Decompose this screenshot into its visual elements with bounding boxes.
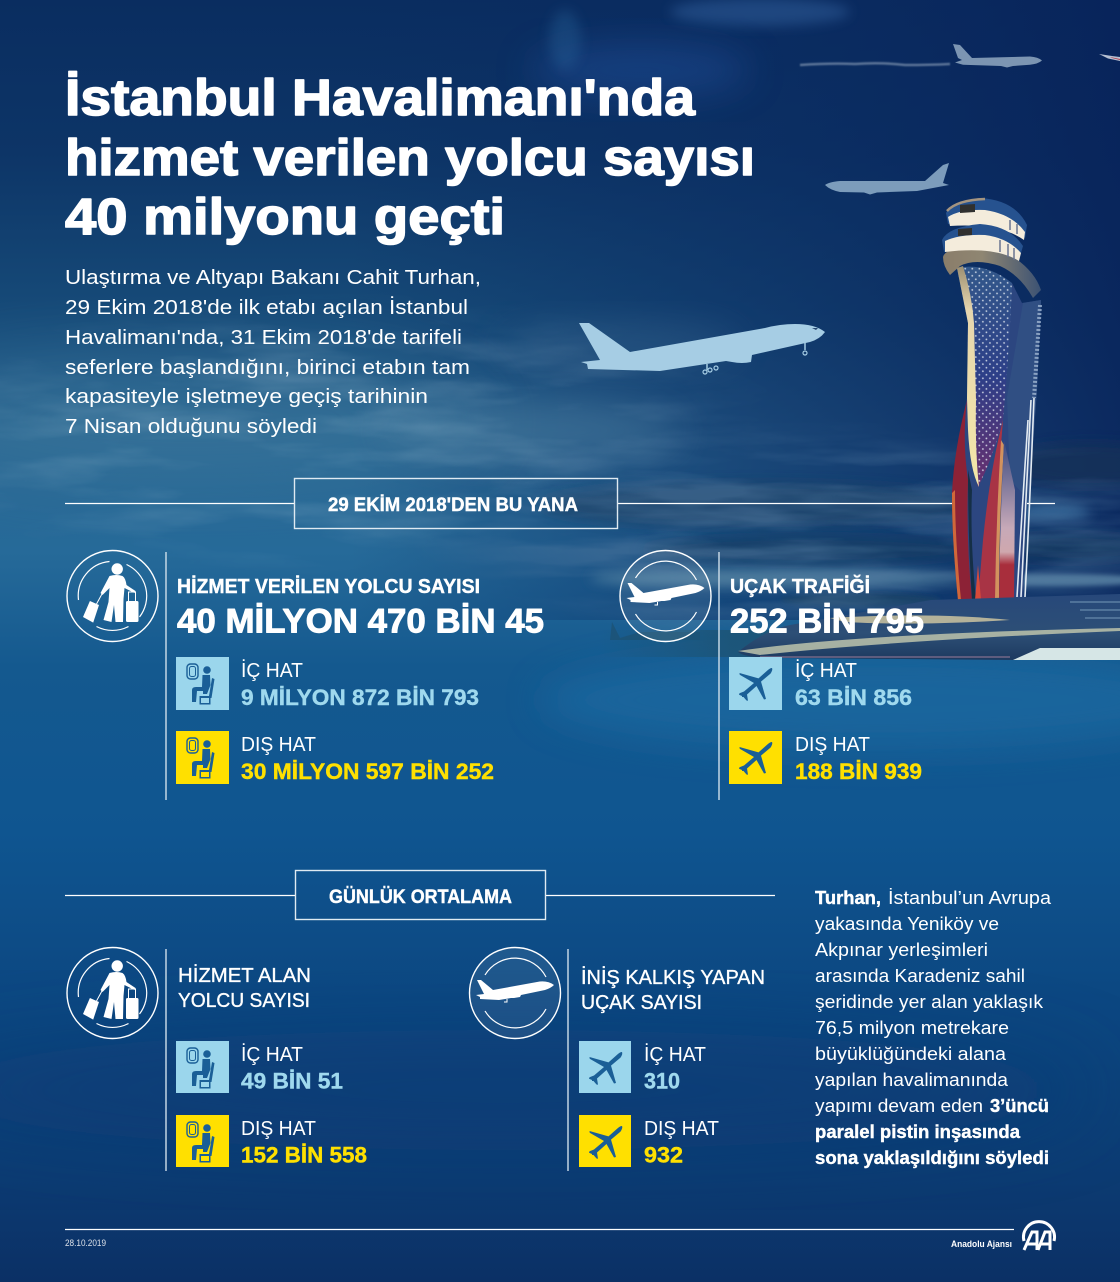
section header: daily average: GÜNLÜK ORTALAMA — [329, 885, 512, 908]
title: 40 milyonu geçti — [65, 188, 505, 245]
side text block — [815, 887, 1052, 1168]
intro paragraph — [65, 267, 481, 438]
terminal roof — [738, 594, 1120, 660]
section header: 29 Ekim: 29 EKİM 2018'DEN BU YANA — [328, 493, 578, 516]
panel: daily passengers — [67, 948, 367, 1171]
panel: aircraft traffic: UÇAK TRAFİĞİ — [730, 574, 870, 598]
section header: 29 Ekim — [65, 478, 1055, 528]
panel: daily flights: DIŞ HAT — [644, 1118, 719, 1140]
title: İstanbul Havalimanı'nda — [65, 69, 696, 126]
panel: daily flights: 310 — [644, 1068, 680, 1094]
panel: aircraft traffic: DIŞ HAT — [795, 734, 870, 756]
side text block: yapımı devam eden — [815, 1095, 983, 1116]
panel: daily flights: İNİŞ KALKIŞ YAPAN — [581, 966, 765, 989]
panel: aircraft traffic: 63 BİN 856 — [795, 685, 912, 710]
panel: daily passengers: HİZMET ALAN — [178, 964, 311, 987]
side text block: büyüklüğündeki alana — [815, 1043, 1007, 1064]
side text block: 76,5 milyon metrekare — [815, 1017, 1009, 1038]
side text block: şeridinde yer alan yaklaşık — [815, 991, 1044, 1012]
panel: daily passengers: 152 BİN 558 — [241, 1142, 367, 1168]
icon: AA logo — [1024, 1222, 1054, 1250]
side text block: arasında Karadeniz sahil — [815, 965, 1025, 986]
panel: aircraft traffic: 188 BİN 939 — [795, 759, 922, 784]
panel: daily passengers: 49 BİN 51 — [241, 1068, 343, 1094]
side text block: Akpınar yerleşimleri — [815, 939, 988, 960]
intro paragraph: Ulaştırma ve Altyapı Bakanı Cahit Turhan, — [65, 267, 481, 289]
panel: aircraft traffic: İÇ HAT — [795, 659, 857, 682]
intro paragraph: Havalimanı'nda, 31 Ekim 2018'de tarifeli — [65, 327, 462, 349]
footer: Anadolu Ajansı — [951, 1239, 1012, 1250]
panel: daily passengers: DIŞ HAT — [241, 1118, 316, 1140]
large foreground plane — [579, 323, 825, 374]
panel: daily flights: İÇ HAT — [644, 1043, 706, 1066]
icon: plane circle daily — [470, 948, 560, 1038]
side text block: Turhan, — [815, 887, 881, 908]
footer: 28.10.2019 — [65, 1238, 106, 1248]
tiny plane top right — [1095, 52, 1120, 61]
intro paragraph: 7 Nisan olduğunu söyledi — [65, 416, 317, 438]
intro paragraph: seferlere başlandığını, birinci etabın tam — [65, 357, 470, 379]
title: hizmet verilen yolcu sayısı — [65, 129, 755, 186]
contrail — [800, 63, 950, 65]
panel: total passengers: 40 MİLYON 470 BİN 45 — [177, 602, 544, 640]
panel: daily passengers: İÇ HAT — [241, 1043, 303, 1066]
side text block: yapılan havalimanında — [815, 1069, 1009, 1090]
panel: total passengers — [67, 550, 544, 800]
side text block: İstanbul’un Avrupa — [888, 887, 1052, 908]
panel: aircraft traffic — [620, 550, 924, 800]
icon: plane circle — [620, 550, 711, 642]
panel: total passengers: 30 MİLYON 597 BİN 252 — [241, 759, 494, 784]
intro paragraph: 29 Ekim 2018'de ilk etabı açılan İstanbul — [65, 296, 468, 319]
panel: daily flights: UÇAK SAYISI — [581, 992, 702, 1014]
panel: total passengers: 9 MİLYON 872 BİN 793 — [241, 685, 479, 710]
side text block: paralel pistin inşasında — [815, 1121, 1021, 1142]
panel: total passengers: DIŞ HAT — [241, 734, 316, 756]
title — [65, 69, 755, 245]
panel: total passengers: İÇ HAT — [241, 659, 303, 682]
panel: aircraft traffic: 252 BİN 795 — [730, 602, 924, 640]
footer — [65, 1222, 1054, 1250]
side text block: 3’üncü — [990, 1095, 1049, 1116]
icon: passenger circle daily — [67, 948, 158, 1038]
middle plane silhouette — [825, 163, 949, 194]
panel: total passengers: HİZMET VERİLEN YOLCU SAYISI — [177, 575, 480, 598]
icon: passenger circle — [67, 550, 158, 642]
side text block: sona yaklaşıldığını söyledi — [815, 1147, 1049, 1168]
side text block: yakasında Yeniköy ve — [815, 913, 999, 934]
top plane silhouette — [953, 44, 1042, 68]
control tower — [942, 198, 1041, 600]
panel: daily flights: 932 — [644, 1142, 683, 1168]
panel: daily flights — [470, 948, 765, 1171]
panel: daily passengers: YOLCU SAYISI — [178, 990, 310, 1012]
intro paragraph: kapasiteyle işletmeye geçiş tarihinin — [65, 386, 428, 408]
section header: daily average — [65, 870, 775, 920]
